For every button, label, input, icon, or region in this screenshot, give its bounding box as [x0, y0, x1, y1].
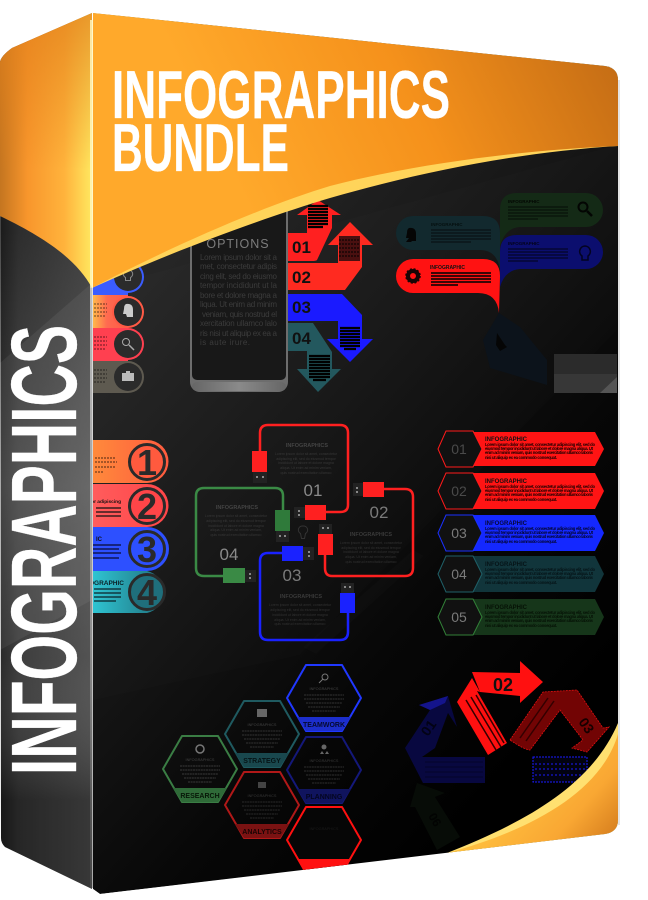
phone body text	[200, 253, 278, 347]
item 3: 3	[137, 529, 157, 570]
row 01: 01	[451, 441, 467, 457]
phone body text: veniam, quis nostrud el	[202, 310, 277, 319]
item 2: for adipiscing	[90, 499, 121, 505]
row 03: nisi ut aliquip ex ea commodo consequat.	[485, 539, 557, 544]
row 01: nisi ut aliquip ex ea commodo consequat.	[485, 455, 557, 460]
hexagon: research	[163, 736, 237, 802]
box left side face	[0, 13, 96, 889]
box front face	[89, 13, 618, 894]
item 4: 4	[137, 572, 157, 613]
arrow 02	[457, 661, 543, 755]
arrow 01	[288, 200, 341, 261]
bubble: red	[396, 259, 500, 313]
hexagon: analytics: INFOGRAPHICS	[248, 794, 277, 798]
front title: INFOGRAPHICS	[112, 57, 450, 133]
panel: numbered hexagon banners	[438, 431, 604, 635]
hand silhouette	[483, 313, 547, 385]
bottom right orange corner	[447, 723, 618, 860]
cable 04: 04	[220, 545, 238, 564]
hexagon: teamwork: INFOGRAPHICS	[310, 687, 339, 691]
row 02: 02	[451, 483, 467, 499]
arrow 03: 03	[292, 298, 311, 317]
row 01: INFOGRAPHIC	[485, 437, 528, 443]
phone body text: liqua. Ut enim ad minim	[200, 300, 277, 309]
cable 04: quis nostrud exercitation ullamco	[211, 533, 262, 537]
hexagon: bright red	[287, 807, 361, 873]
item 4	[89, 571, 164, 613]
row 02: Lorem ipsum dolor sit amet, consectetur adipiscing elit, sed do	[485, 484, 595, 489]
item 3: IC	[96, 537, 103, 543]
cable 02: INFOGRAPHICS	[350, 532, 392, 538]
row 02	[438, 473, 604, 509]
row 04: eiusmod tempor incididunt ut labore et dolore magna aliqua. Ut	[485, 571, 594, 576]
row 02: INFOGRAPHIC	[485, 479, 528, 485]
row 04: enim ad minim veniam, quis nostrud exercitation ullamco laboris	[485, 575, 594, 580]
phone body text: tempor incididunt ut la	[200, 281, 278, 290]
bubble: blue: INFOGRAPHIC	[508, 241, 540, 246]
panel: speech bubbles	[396, 193, 617, 393]
row 03: enim ad minim veniam, quis nostrud exercitation ullamco laboris	[485, 534, 594, 539]
coloured strips	[93, 279, 128, 393]
hexagon: planning: INFOGRAPHICS	[310, 759, 339, 763]
bubble: teal: INFOGRAPHIC	[431, 222, 463, 227]
row 03: INFOGRAPHIC	[485, 521, 528, 527]
icon: head	[112, 296, 144, 328]
row 02: nisi ut aliquip ex ea commodo consequat.	[485, 497, 557, 502]
arrow 03: 03	[576, 715, 598, 737]
panel: USB cable infographic	[196, 425, 413, 640]
row 01: Lorem ipsum dolor sit amet, consectetur adipiscing elit, sed do	[485, 442, 595, 447]
panel: circle icon list	[93, 261, 144, 393]
row 03	[438, 515, 604, 551]
item 2	[90, 484, 168, 527]
cable 03: quis nostrud exercitation ullamco	[275, 622, 326, 626]
row 04: Lorem ipsum dolor sit amet, consectetur adipiscing elit, sed do	[485, 567, 595, 572]
arrow 06: 06	[425, 810, 444, 829]
bubble: green	[500, 193, 603, 246]
row 04: 04	[451, 566, 467, 582]
hexagon: research: INFOGRAPHICS	[186, 758, 215, 762]
row 05: nisi ut aliquip ex ea commodo consequat.	[485, 623, 557, 628]
bubble: blue	[500, 235, 603, 287]
arrow 04: 04	[292, 329, 311, 348]
hexagon: teamwork: TEAMWORK	[303, 722, 345, 729]
cable 03: 03	[283, 566, 301, 585]
cable 02: Lorem ipsum dolor sit amet, consectetur	[340, 541, 403, 545]
item 2: 2	[137, 486, 157, 527]
hexagon: analytics: ANALYTICS	[242, 829, 282, 836]
phone body text: ris nisi ut aliquip ex ea a	[200, 329, 278, 338]
cable 03: adipiscing elit, sed do eiusmod tempor	[270, 608, 331, 612]
item 4: OGRAPHIC	[89, 580, 124, 587]
item 1: 1	[137, 442, 157, 483]
row 03: Lorem ipsum dolor sit amet, consectetur adipiscing elit, sed do	[485, 526, 595, 531]
cable 01: 01	[304, 481, 322, 500]
row 02: eiusmod tempor incididunt ut labore et dolore magna aliqua. Ut	[485, 488, 594, 493]
row 03: 03	[451, 525, 467, 541]
panel: numbered circles list	[89, 440, 169, 613]
cable 04: incididunt ut labore et dolore magna	[208, 524, 264, 528]
cable 04: INFOGRAPHICS	[216, 505, 258, 511]
phone body text: xercitation ullamco lalo	[200, 319, 278, 328]
cable 01: adipiscing elit, sed do eiusmod tempor	[276, 457, 337, 461]
row 05: Lorem ipsum dolor sit amet, consectetur adipiscing elit, sed do	[485, 610, 595, 615]
row 05: 05	[451, 609, 467, 625]
cable 02: incididunt ut labore et dolore magna	[343, 550, 399, 554]
front title	[112, 57, 450, 186]
row 04: INFOGRAPHIC	[485, 562, 528, 568]
panel: phone options	[190, 211, 288, 392]
hexagon: strategy: INFOGRAPHICS	[248, 723, 277, 727]
phone body text: cing elit, sed do eiusmo	[200, 272, 278, 281]
hexagon: teamwork	[287, 665, 361, 731]
row 02: enim ad minim veniam, quis nostrud exercitation ullamco laboris	[485, 492, 594, 497]
cable 02: quis nostrud exercitation ullamco	[346, 560, 397, 564]
row 05	[438, 599, 604, 635]
cable 01: INFOGRAPHICS	[286, 443, 328, 449]
cable 01: incididunt ut labore et dolore magna	[278, 461, 334, 465]
arrow 06	[410, 783, 460, 850]
arrow 01: 01	[417, 717, 440, 739]
cable 03: INFOGRAPHICS	[280, 594, 322, 600]
row 01: enim ad minim veniam, quis nostrud exercitation ullamco laboris	[485, 450, 594, 455]
arrow 04	[288, 323, 341, 392]
hexagon: planning	[287, 737, 361, 803]
arrow 02: 02	[292, 268, 311, 287]
panel: hexagon cluster	[163, 665, 361, 873]
front title: BUNDLE	[112, 110, 289, 186]
arrow 03	[510, 690, 609, 752]
row 05: INFOGRAPHIC	[485, 605, 528, 611]
cable 02: 02	[370, 503, 388, 522]
arrow 01: 01	[292, 238, 311, 257]
icon: magnifier	[112, 328, 144, 360]
phone body text: met, consectetur adipis	[200, 262, 277, 271]
row 05: enim ad minim veniam, quis nostrud exercitation ullamco laboris	[485, 618, 594, 623]
phone body text: Lorem ipsum dolor sit a	[200, 253, 278, 262]
phone heading: OPTIONS	[206, 237, 270, 251]
cable 03: incididunt ut labore et dolore magna	[272, 613, 328, 617]
panel: circular arrows	[405, 661, 609, 850]
row 04: nisi ut aliquip ex ea commodo consequat.	[485, 580, 557, 585]
phone body text: is aute irure.	[200, 338, 250, 347]
cable 03	[260, 546, 355, 640]
icon: briefcase	[112, 361, 144, 393]
icon: bulb	[114, 266, 144, 293]
grey square	[554, 354, 617, 393]
arrow 01	[405, 696, 485, 783]
icon: small bulb	[298, 526, 308, 538]
cable 01: Lorem ipsum dolor sit amet, consectetur	[275, 452, 338, 456]
cable 01: quis nostrud exercitation ullamco	[281, 471, 332, 475]
front orange wave	[92, 13, 618, 288]
arrow 02: 02	[493, 675, 513, 695]
hexagon: research: RESEARCH	[180, 793, 220, 800]
cable 04: adipiscing elit, sed do eiusmod tempor	[206, 519, 267, 523]
cable 03: aliqua. Ut enim ad minim veniam,	[274, 618, 326, 622]
row 03: eiusmod tempor incididunt ut labore et dolore magna aliqua. Ut	[485, 530, 594, 535]
cable 04: aliqua. Ut enim ad minim veniam,	[210, 528, 262, 532]
hexagon: strategy	[225, 701, 299, 767]
cable 01: aliqua. Ut enim ad minim veniam,	[280, 466, 332, 470]
bubble: green: INFOGRAPHIC	[508, 199, 540, 204]
cable 02	[318, 482, 413, 576]
bubble: red: INFOGRAPHIC	[430, 265, 465, 271]
cable 01	[252, 425, 348, 520]
phone body text: bore et dolore magna a	[200, 291, 278, 300]
arrow 03	[288, 294, 373, 362]
hexagon: bright red: INFOGRAPHICS	[310, 827, 339, 831]
bubble: teal	[396, 216, 500, 270]
row 04	[438, 556, 604, 592]
cable 02: adipiscing elit, sed do eiusmod tempor	[341, 546, 402, 550]
box edge highlight	[90, 20, 620, 888]
hexagon: strategy: STRATEGY	[243, 758, 281, 765]
item 1	[93, 440, 168, 483]
item 3	[93, 527, 169, 571]
hexagon: planning: PLANNING	[306, 794, 343, 801]
cable 04	[196, 488, 290, 583]
cable 02: aliqua. Ut enim ad minim veniam,	[345, 555, 397, 559]
cable 04: Lorem ipsum dolor sit amet, consectetur	[205, 514, 268, 518]
panel: numbered arrows	[288, 200, 373, 392]
row 01	[438, 431, 604, 467]
arrow 02	[288, 222, 373, 290]
cable 03: Lorem ipsum dolor sit amet, consectetur	[269, 603, 332, 607]
dotted blue block	[533, 757, 587, 782]
row 05: eiusmod tempor incididunt ut labore et dolore magna aliqua. Ut	[485, 614, 594, 619]
row 01: eiusmod tempor incididunt ut labore et dolore magna aliqua. Ut	[485, 446, 594, 451]
hexagon: analytics	[225, 772, 299, 838]
